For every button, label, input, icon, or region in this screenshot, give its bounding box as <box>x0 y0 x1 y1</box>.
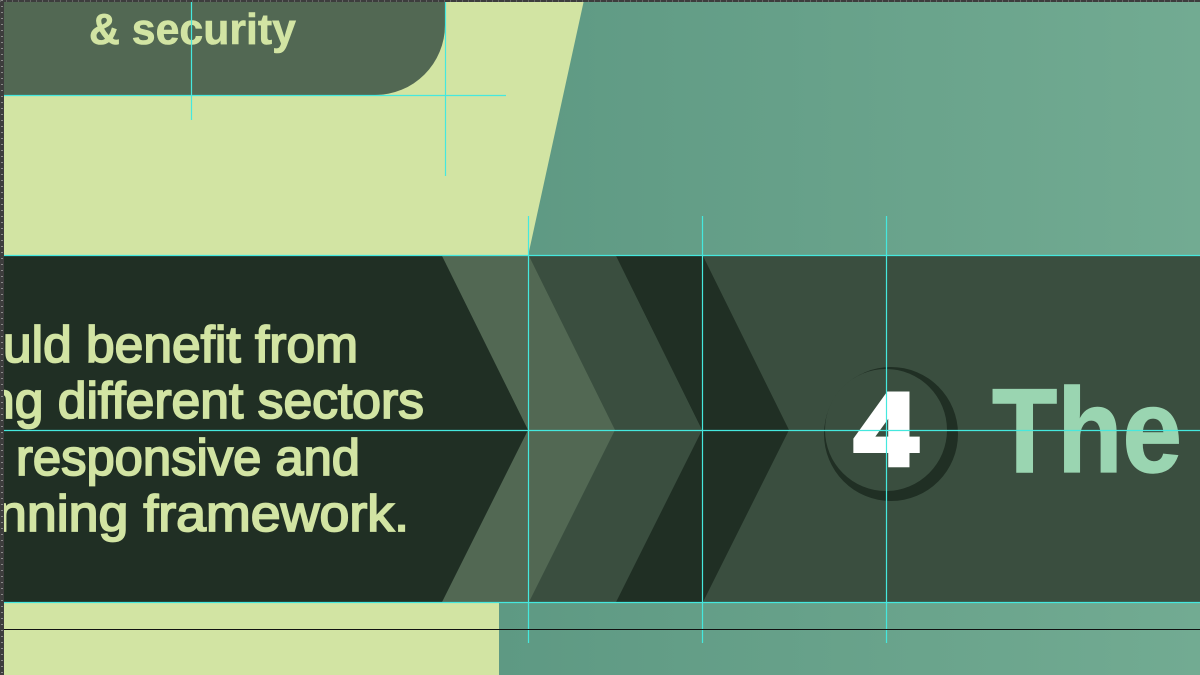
text block: body paragraph: nning framework. <box>0 485 409 542</box>
number 4: 4 <box>855 374 917 486</box>
arrow: chevron light second <box>442 256 615 602</box>
text block: body paragraph <box>0 316 424 542</box>
arrow: chevron mid third <box>529 256 702 602</box>
panel: dark text arrow <box>0 256 528 602</box>
heading: The: The <box>992 364 1182 498</box>
panel: upper teal slanted block <box>528 0 1200 256</box>
heading: security: & security <box>89 5 297 54</box>
arrow: chevron dark fourth <box>616 256 789 602</box>
black rule <box>4 629 1200 630</box>
panel: security heading tab <box>0 0 445 95</box>
panel: lower teal block <box>499 602 1200 675</box>
text block: body paragraph: uld benefit from <box>3 316 358 373</box>
text block: body paragraph: responsive and <box>16 429 360 486</box>
icon: number 4 badge <box>824 367 958 501</box>
panel: dark band background <box>0 256 1200 602</box>
